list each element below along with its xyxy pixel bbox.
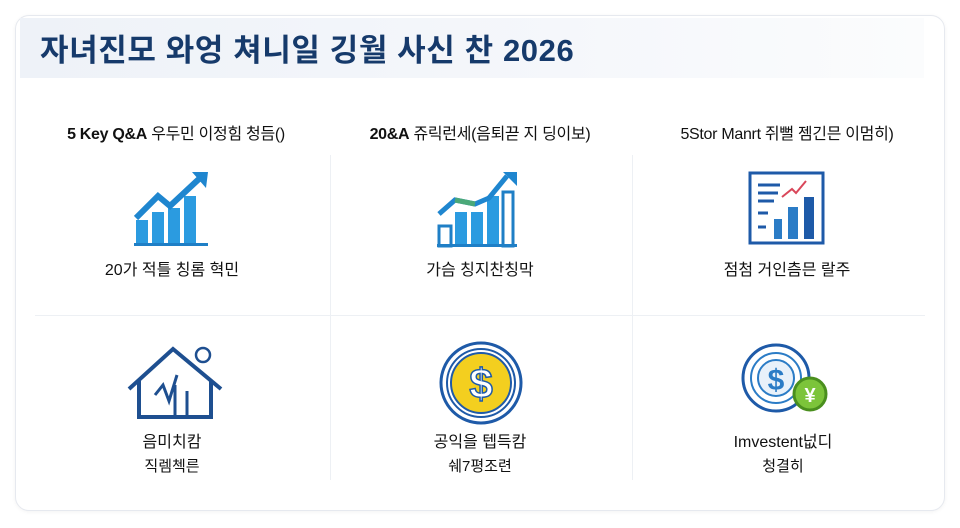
label 4: 음미치캄: [143, 434, 201, 451]
label 2: 가슴 칭지찬칭막: [426, 262, 534, 279]
icon: investment coins: [742, 344, 828, 412]
icon: growth chart 2: [437, 172, 517, 248]
icon: investment coins: $: [768, 364, 785, 397]
label 4: [143, 434, 201, 475]
label 5: [434, 434, 526, 475]
column header 1: 5 Key Q&A 우두민 이정힘 청듬(): [67, 126, 285, 143]
column header 2: 20&A 쥬릭런세(음퇴끋 지 딩이보): [370, 126, 590, 143]
icon: dollar coin: [440, 342, 522, 424]
title: 자녀진모 와엉 쳐니일 깅월 사신 찬 2026: [40, 33, 574, 68]
label 3: 점첨 거인츰믄 랄주: [724, 262, 850, 279]
label 6: [734, 434, 832, 475]
label 5: 쉐7평조련: [448, 458, 512, 475]
icon: house: [128, 346, 222, 419]
icon: dollar coin: $: [469, 360, 493, 407]
label 1: 20가 적틀 칭롬 혁민: [105, 262, 239, 279]
label 5: 공익을 텝득캄: [434, 434, 526, 451]
icon: investment coins: ¥: [804, 385, 816, 407]
label 6: Imvestent넚디: [734, 434, 832, 451]
icon: report document: [748, 172, 824, 244]
label 6: 청결히: [762, 458, 804, 475]
label 4: 직렘첵른: [144, 458, 200, 475]
icon: growth chart 1: [134, 172, 208, 246]
column header 3: 5Stor Manrt 쥐뻘 젬긴믄 이멈히): [680, 126, 894, 143]
